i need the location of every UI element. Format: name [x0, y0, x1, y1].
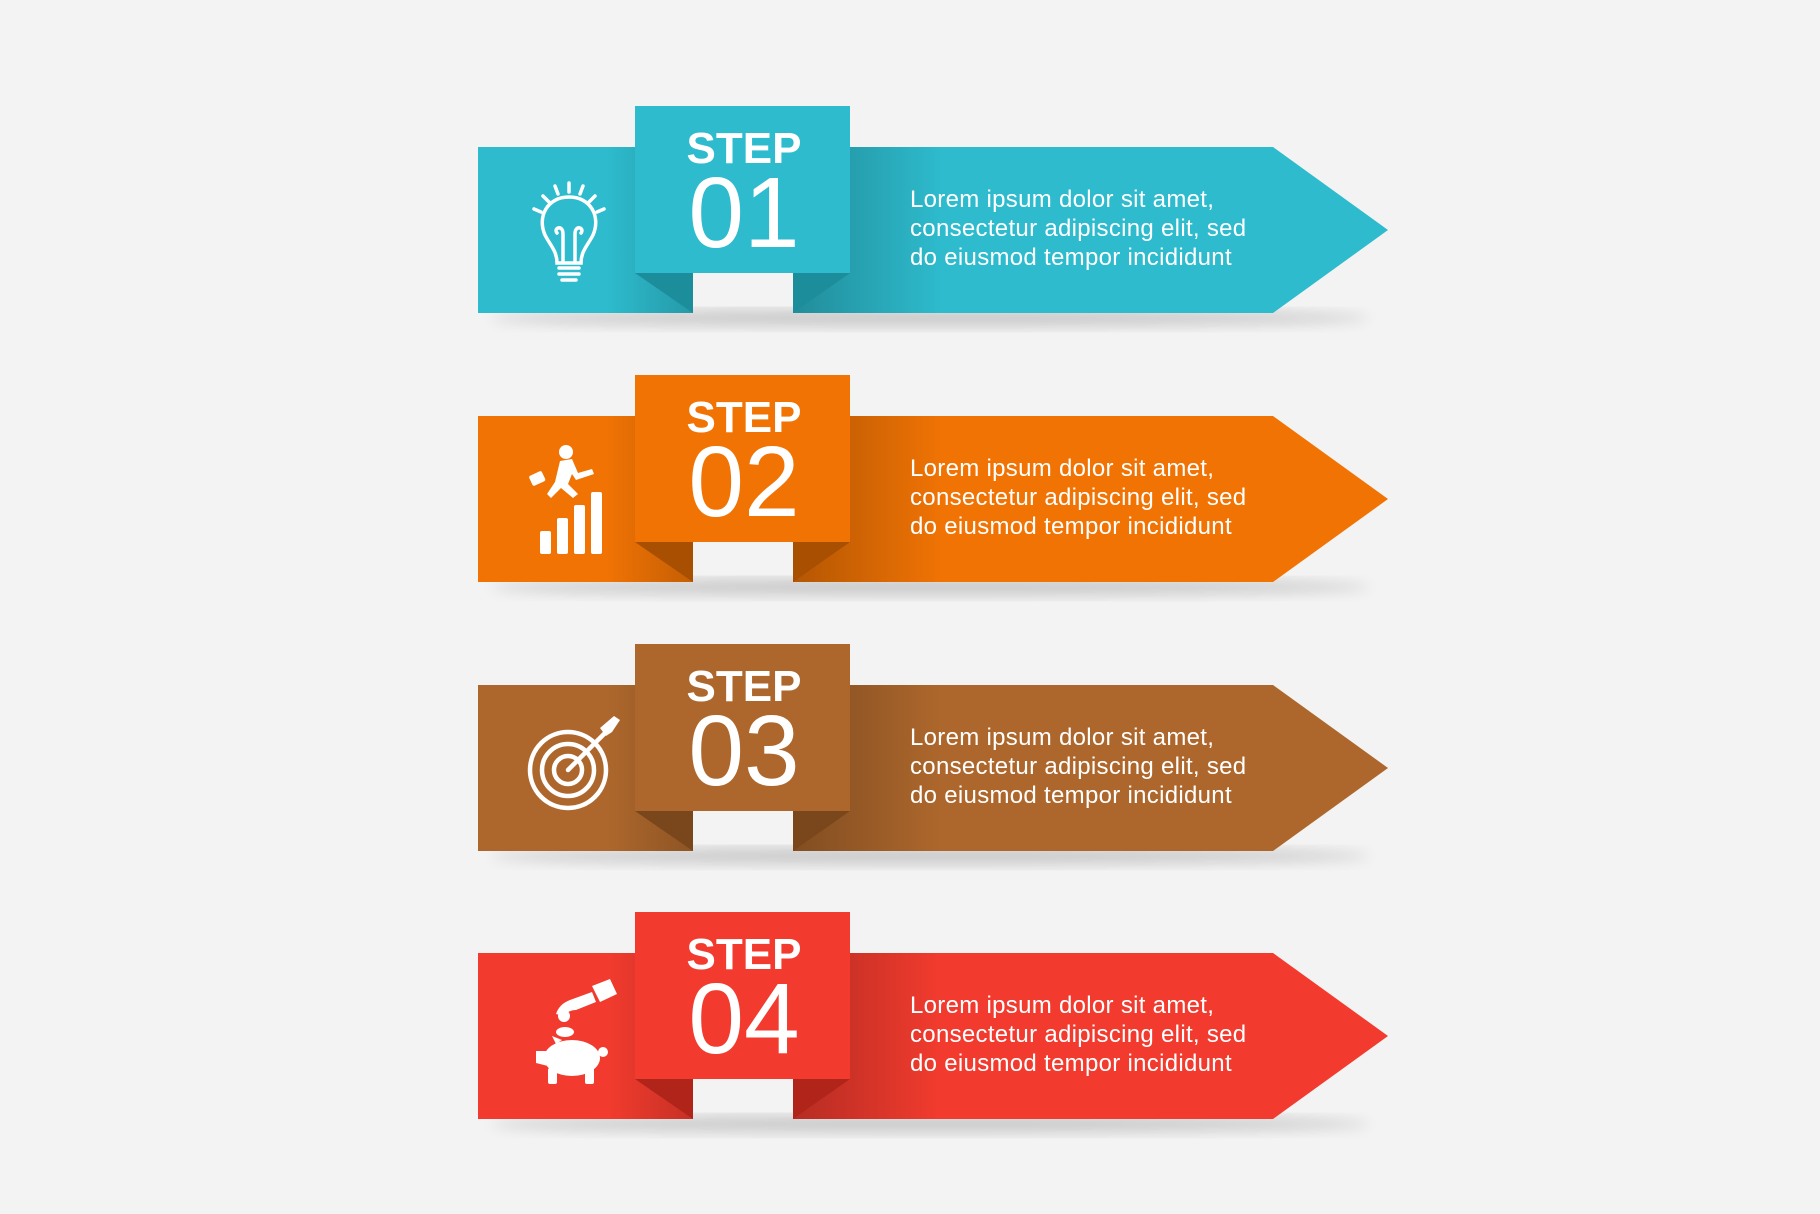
text block: do eiusmod tempor incididunt — [910, 782, 1232, 809]
step 4: STEP — [687, 930, 801, 979]
step 4 — [478, 912, 1388, 1132]
icon: piggy bank — [536, 979, 617, 1084]
step 3: STEP — [687, 662, 801, 711]
step 1: STEP — [687, 124, 801, 173]
text block: Lorem ipsum dolor sit amet, — [910, 992, 1214, 1019]
icon: target — [530, 716, 620, 808]
text block: consectetur adipiscing elit, sed — [910, 484, 1246, 511]
tab: step 04 — [635, 912, 850, 1079]
text block: consectetur adipiscing elit, sed — [910, 215, 1246, 242]
step 4: 04 — [688, 963, 800, 1075]
text block: Lorem ipsum dolor sit amet, — [910, 186, 1214, 213]
step 2: 02 — [688, 426, 800, 538]
text block: consectetur adipiscing elit, sed — [910, 1021, 1246, 1048]
step 3: 03 — [688, 695, 800, 807]
text block: do eiusmod tempor incididunt — [910, 244, 1232, 271]
text block: do eiusmod tempor incididunt — [910, 513, 1232, 540]
text block: do eiusmod tempor incididunt — [910, 1050, 1232, 1077]
text block: Lorem ipsum dolor sit amet, — [910, 455, 1214, 482]
text block: Lorem ipsum dolor sit amet, — [910, 724, 1214, 751]
icon: climbing man — [529, 445, 602, 554]
text block: consectetur adipiscing elit, sed — [910, 753, 1246, 780]
step 2: STEP — [687, 393, 801, 442]
step 2 — [478, 375, 1388, 595]
tab: step 01 — [635, 106, 850, 273]
tab: step 02 — [635, 375, 850, 542]
step 1: 01 — [688, 157, 800, 269]
step 3 — [478, 644, 1388, 864]
tab: step 03 — [635, 644, 850, 811]
icon: light bulb — [534, 183, 604, 280]
step 1 — [478, 106, 1388, 326]
